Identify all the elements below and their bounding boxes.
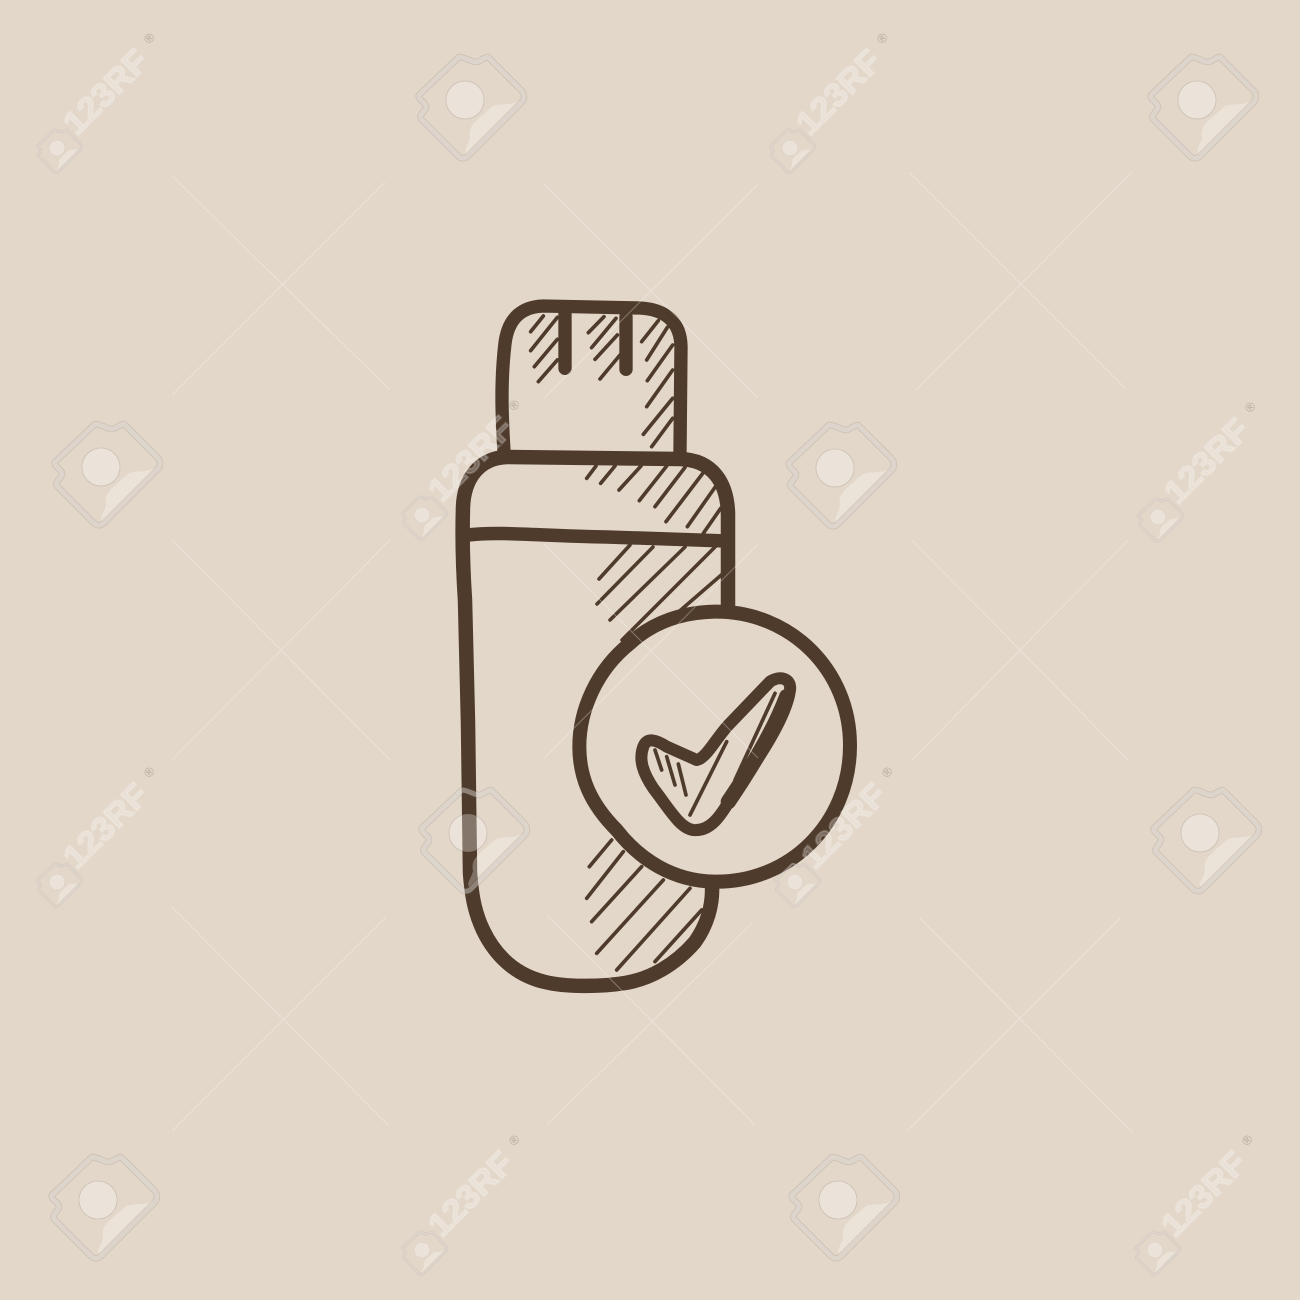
- logo middle right: ®: [1241, 398, 1259, 416]
- logo bottom right: [1114, 1127, 1284, 1297]
- icon: usb flash drive with check mark: [463, 306, 850, 986]
- connector contacts: [565, 313, 626, 369]
- logo top left: [16, 25, 186, 195]
- cap hatching: [531, 316, 673, 447]
- logo top left: 123RF: [56, 42, 155, 142]
- drive body: [463, 457, 728, 986]
- logo lower centre: [754, 759, 924, 929]
- check mark right arm thickening: [728, 697, 787, 802]
- body hatching, lower: [587, 840, 702, 970]
- logo bottom right: ®: [1238, 1131, 1256, 1149]
- check mark hatching: [655, 693, 775, 815]
- logo lower centre: 123RF: [794, 776, 893, 876]
- badge circle: [579, 612, 850, 882]
- body hatching, upper: [587, 466, 721, 533]
- logo bottom centre: ®: [505, 1131, 523, 1149]
- logo top right: ®: [873, 29, 891, 47]
- logo lower left: [16, 759, 186, 929]
- faint diagonal crosses: [172, 172, 1133, 1133]
- logo bottom right: 123RF: [1154, 1144, 1253, 1244]
- logo bottom centre: [381, 1127, 551, 1297]
- logo middle centre: 123RF: [421, 409, 520, 509]
- logo bottom centre: 123RF: [421, 1144, 520, 1244]
- cap outline: [502, 306, 681, 452]
- body outline: [463, 457, 728, 986]
- body band: [468, 533, 727, 541]
- logo top right: [749, 25, 919, 195]
- body hatching, middle: [597, 545, 727, 640]
- logo middle centre: [381, 392, 551, 562]
- logo middle centre: ®: [505, 396, 523, 414]
- logo top left: ®: [140, 29, 158, 47]
- logo top right: 123RF: [789, 42, 888, 142]
- check mark outline: [641, 678, 790, 830]
- logo middle right: 123RF: [1157, 411, 1256, 511]
- logo middle right: [1117, 394, 1287, 564]
- logo lower centre: ®: [878, 763, 896, 781]
- check badge: [579, 612, 850, 882]
- logo lower left: ®: [140, 763, 158, 781]
- logo lower left: 123RF: [56, 776, 155, 876]
- usb connector cap: [502, 306, 681, 452]
